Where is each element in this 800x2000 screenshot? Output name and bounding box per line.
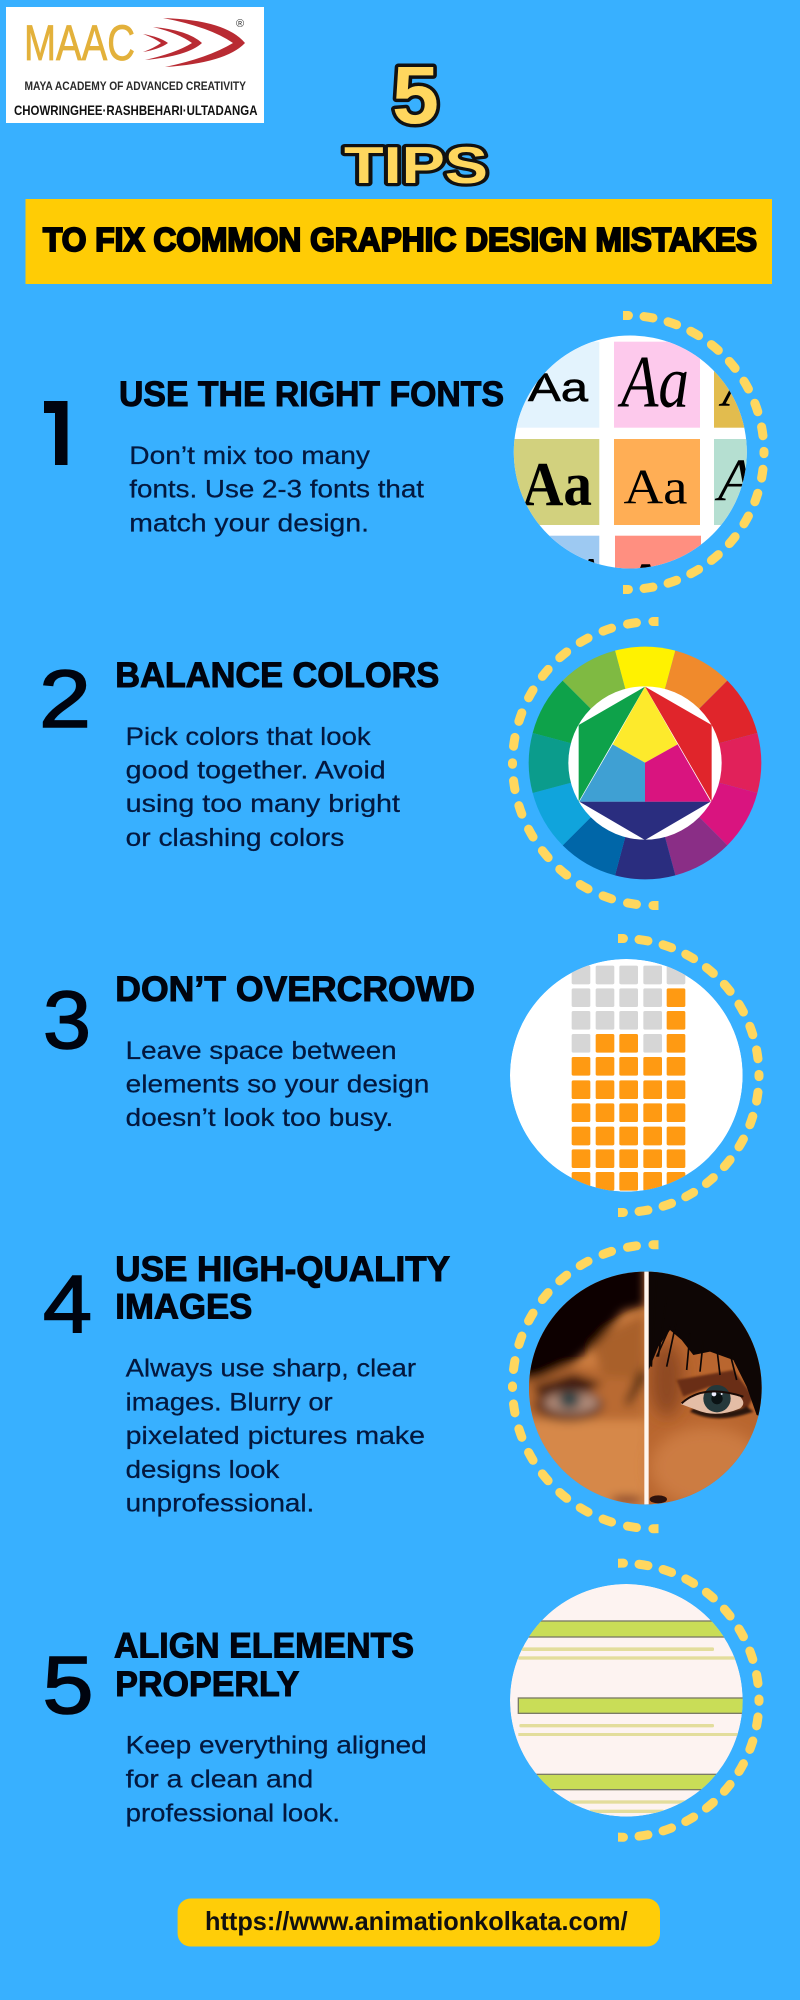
number 2: 2 — [39, 654, 91, 745]
body text 3: elements so your design — [126, 1070, 429, 1098]
body text 5 — [126, 1731, 427, 1827]
dashed arc 3 — [618, 934, 764, 1217]
dashed arc 4 — [512, 1245, 684, 1529]
footer url pill — [178, 1898, 660, 1946]
body text 4: pixelated pictures make — [126, 1422, 425, 1450]
body text 2 — [126, 723, 400, 852]
tip 3 — [43, 938, 759, 1213]
body text 3 — [126, 1037, 429, 1132]
heading: align elements properly: PROPERLY — [115, 1665, 299, 1704]
image: blurry vs sharp eye photo — [529, 1272, 762, 1504]
heading: use high-quality images: USE HIGH-QUALITY — [115, 1250, 450, 1289]
image: font samples: Aa — [522, 451, 592, 519]
image: font samples: Aa — [617, 342, 689, 424]
sharp half of face — [646, 1272, 762, 1504]
number 3: 3 — [43, 975, 91, 1066]
body text 5: for a clean and — [126, 1765, 313, 1793]
dashed arc 1 — [623, 311, 768, 594]
heading: balance colors: BALANCE COLORS — [115, 656, 439, 695]
body text 5: Keep everything aligned — [126, 1731, 427, 1759]
body text 1: fonts. Use 2-3 fonts that — [129, 476, 424, 504]
logo wordmark: MAAC — [24, 15, 135, 71]
heading: use high-quality images: IMAGES — [115, 1288, 252, 1326]
body text 4: Always use sharp, clear — [126, 1355, 416, 1383]
image: font samples: A — [714, 448, 755, 514]
tip 5 — [42, 1563, 765, 1837]
logo chevrons — [143, 18, 245, 67]
body text 2: good together. Avoid — [126, 757, 386, 785]
image: font samples: A — [569, 547, 603, 603]
body text 3: Leave space between — [126, 1037, 397, 1065]
blurred half of face — [529, 1272, 646, 1504]
body text 2: using too many bright — [126, 790, 400, 818]
heading: align elements properly: ALIGN ELEMENTS — [114, 1626, 414, 1666]
body text 4: unprofessional. — [126, 1490, 314, 1518]
body text 5: professional look. — [126, 1799, 340, 1827]
body text 2: Pick colors that look — [126, 723, 371, 751]
footer url text: https://www.animationkolkata.com/ — [205, 1906, 628, 1936]
body text 4: images. Blurry or — [126, 1388, 333, 1416]
image: aligned layout bands — [510, 1584, 743, 1817]
title: TIPS: TIPS — [344, 137, 488, 195]
heading: use high-quality images — [115, 1250, 450, 1326]
logo: MAAC — [6, 7, 264, 123]
image: font samples: Aa — [624, 458, 688, 514]
number 1: 1 — [34, 383, 85, 485]
dashed arc 5 — [592, 1563, 759, 1837]
tip 2 — [39, 621, 761, 906]
tip 1 — [44, 311, 768, 594]
number 5: 5 — [42, 1640, 94, 1731]
dashed arc 2 — [512, 621, 684, 906]
logo full name: MAYA ACADEMY OF ADVANCED CREATIVITY — [24, 79, 246, 93]
body text 3: doesn’t look too busy. — [126, 1104, 393, 1132]
logo registered mark: ® — [236, 18, 244, 30]
body text 2: or clashing colors — [126, 824, 344, 852]
number 1 — [44, 401, 68, 465]
tip 4 — [43, 1245, 770, 1529]
logo branches: CHOWRINGHEE·RASHBEHARI·ULTADANGA — [14, 102, 258, 118]
title: 5: 5 — [392, 50, 439, 141]
number 4: 4 — [43, 1259, 92, 1350]
image: font samples — [514, 336, 747, 568]
image: colour wheel — [529, 647, 761, 879]
body text 4 — [126, 1355, 425, 1518]
image: crowded grid of squares — [510, 959, 743, 1192]
banner text: TO FIX COMMON GRAPHIC DESIGN MISTAKES — [43, 221, 757, 258]
heading: don't overcrowd: DON’T OVERCROWD — [115, 970, 475, 1009]
image: font samples: Aa — [528, 366, 589, 410]
body text 4: designs look — [126, 1456, 280, 1484]
heading: align elements properly — [114, 1626, 414, 1704]
body text 1: Don’t mix too many — [129, 442, 371, 470]
image: font samples: A — [624, 551, 667, 617]
heading: use the right fonts: USE THE RIGHT FONTS — [119, 375, 504, 414]
image: font samples: A — [718, 353, 759, 419]
banner — [26, 199, 772, 284]
body text 1: match your design. — [129, 509, 369, 537]
body text 1 — [129, 442, 424, 537]
